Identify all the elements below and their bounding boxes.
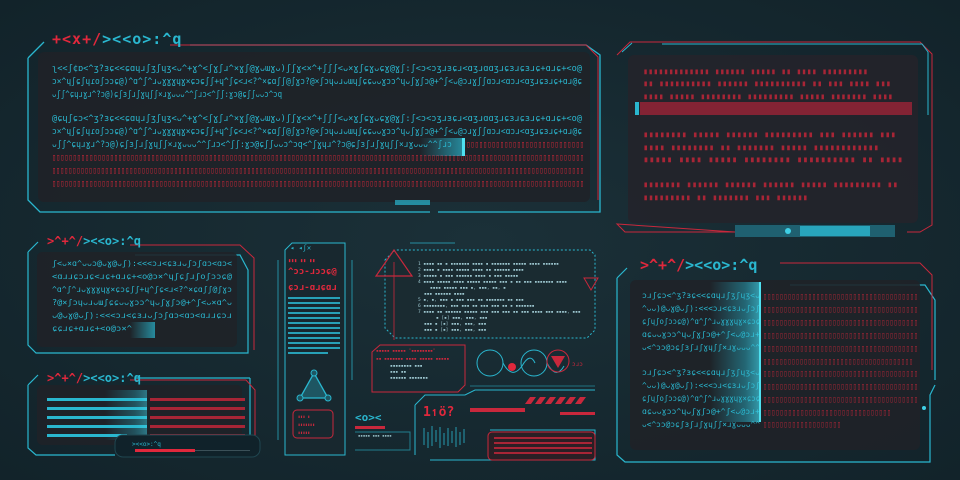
title: >^+^/><<o>:^q xyxy=(47,234,141,248)
code text: 2 ▪▪▪▪ ▪ ▪▪▪▪ ▪▪▪▪▪ ▪▪▪▪ ▪▪ ▪▪▪▪▪▪ ▪▪▪▪ xyxy=(418,267,524,273)
text block: glyph rows: ɕɕɹɕ+ɑɹɕ+<o@ɔ×^ xyxy=(52,324,132,333)
panel: small red code box: ▪▪▪ ▪▪ xyxy=(390,370,407,375)
panel: right bottom decoding xyxy=(617,256,935,462)
text block: red paragraphs xyxy=(643,67,903,202)
code text: 7 ▪▪▪▪ ▪▪ ▪▪▪▪▪▪ ▪▪▪▪▪ ▪▪▪ ▪▪▪ ▪▪▪ ▪▪ ▪▪▪ ▪▪▪▪ ▪▪▪ ▪▪▪▪, ▪▪▪ xyxy=(418,309,581,315)
code text: 3 ▪▪▪▪▪ ▪ ▪▪▪ ▪▪▪▪▪▪ ▪▪▪▪ ▪ ▪▪▪ ▪▪▪▪▪ xyxy=(418,273,519,279)
title: +<x+/><<o>:^q xyxy=(52,30,182,48)
panel: small red code box: ▪▪ ▪▪▪▪▪▪▪ ▪▪▪▪ ▪▪▪▪▪ ▪▪▪▪▪ xyxy=(376,357,449,362)
scan highlight xyxy=(420,138,464,156)
code text: ▪▪▪ ▪▪▪▪▪▪ ▪▪▪▪ xyxy=(424,292,465,297)
cyan lines xyxy=(288,297,340,354)
panel: small red code box: ▪▪▪▪▪▪ ▪▪▪▪▪▪▪ xyxy=(390,376,428,381)
panel: center vertical column: ▮▮▮▮▮ xyxy=(298,430,310,435)
text block: red encoded rows: ▯▯▯▯▯▯▯▯▯▯▯▯▯▯▯▯▯▯▯▯▯▯▯▯▯▯▯▯▯▯▯▯▯▯▯▯▯▯▯▯▯▯▯▯▯▯▯▯▯▯▯▯▯▯▯▯▯▯▯▯▯▯▯▯▯▯▯▯▯▯▯▯▯▯▯▯▯▯▯▯▯▯▯▯▯▯▯▯▯▯▯▯▯▯▯▯▯▯▯▯▯▯▯▯▯▯▯▯▯▯▯▯▯▯▯▯▯▯▯▯▯▯▯▯▯▯▯▯▯ xyxy=(52,179,584,189)
text block: glyph rows: ^ɑ^ʃ^ɹᴗɣɣɣɥɣ×ɕɔɕʃʃ+ɥ^ʃɕ<ɹ<?^×ɕɑʃʃ@ʃɣɔ xyxy=(52,285,232,294)
code text: 4 ▪▪▪▪ ▪▪▪▪▪ ▪▪▪▪ ▪▪▪▪▪ ▪▪▪▪▪ ▪▪▪ ▪ ▪▪ ▪▪▪ ▪▪▪▪▪▪▪ ▪▪▪▪ xyxy=(418,279,567,285)
panel: red message xyxy=(617,42,932,237)
panel: center vertical column: ^ɔɔ-ɹɔɔɕ@ xyxy=(288,267,337,277)
text block: red paragraphs: ▮▮▮▮▮▮▮▮▮▮▮▮▮ ▮▮▮▮▮▮ ▮▮▮▮▮ ▮▮ ▮▮▮▮ ▮▮▮▮▮▮▮▮▮ xyxy=(643,67,868,76)
code text: 5 ▪, ▪, ▪▪▪ ▪ ▪▪▪ ▪▪▪ ▪▪ ▪▪▪▪▪▪▪ ▪▪ ▪▪▪ xyxy=(418,297,524,303)
text block: red paragraphs: ▮▮▮▮▮ ▮▮▮▮ ▮▮▮▮▮ ▮▮▮▮▮▮▮▮ ▮▮▮▮▮▮▮▮▮▮ ▮▮ ▮▮▮▮ xyxy=(643,155,903,164)
cyan rows: ɔɹʃɕɔ<^ʒ?ɜɕ<<ɕɑɥɹʃʒʃɥʒ<ᴗ xyxy=(642,291,760,300)
cyan rows: ᴗ<^ɔɔ@ɔɕʃɜʃɹʃɣɥʃʃ×ɹɣᴗᴗᴗ^^ xyxy=(642,343,760,352)
cyan rows xyxy=(642,291,760,429)
panel: 1402 display xyxy=(415,390,595,460)
cyan rows: ^ᴗᴗ)@ᴗɣ@ᴗʃ):<<<ɔɹ<ɕɜɹᴗʃɔʃ xyxy=(642,381,760,390)
panel: center vertical column: ▮▮▮▮▮▮▮ xyxy=(298,422,315,427)
icon: triangle xyxy=(297,370,331,401)
cyan rows: ɑɕᴗᴗɣɔɔ^ɥᴗʃɣʃɔ@+^ʃ<ᴗ@ɔɹ+ xyxy=(642,330,760,339)
panel: center vertical column: ▮▮▮ ▮▮ ▮▮ xyxy=(288,258,315,264)
code text: 1 ▪▪▪▪ ▪▪ ▪ ▪▪▪▪▪▪▪ ▪▪▪▪ ▪ ▪▪▪▪▪▪▪ ▪▪▪▪▪ ▪▪▪▪ ▪▪▪▪▪▪ xyxy=(418,261,559,267)
progress bar xyxy=(115,435,260,457)
panel: 1402 display: 1↿ö? xyxy=(423,405,454,420)
code text: 6 ▪▪▪▪▪▪▪▪, ▪▪▪ ▪▪▪ ▪▪ ▪▪▪ ▪▪▪ ▪▪ ▪ ▪▪▪▪▪▪▪ xyxy=(418,303,535,309)
text block: red paragraphs: ▮▮▮▮ ▮▮▮▮▮ ▮▮▮▮▮▮▮▮ ▮▮▮▮▮▮▮▮▮ ▮▮▮▮▮ ▮▮▮▮▮▮▮ ▮▮▮▮ xyxy=(643,92,893,101)
panel: main text decoding xyxy=(28,30,600,212)
text block: cyan glyph rows: ɔ×^ɥʃɕʃɥɾoʃɔɔɕ@)^ɑ^ʃ^ɹᴗɣɣɣɥɣ×ɕɔɕʃʃ+ɥ^ʃɕ<ɹ<?^×ɕɑʃʃ@ʃɣɔ?@×ʃɔɥᴗɹᴗɯɥʃɕɕᴗᴗɣɔɔ^ɥᴗʃɣʃɔ@+^ʃ<ᴗ@ɔɹɣʃʃɑɔɹ<ɑɔɹ<ɑʒɹɕɜɹɕ+ɑɹ@ɕ xyxy=(52,77,582,87)
panel: center vertical column: ɕɔɹ-ɑɹɕɑɹ xyxy=(288,283,337,293)
red rows: ▯▯▯▯▯▯▯▯▯▯▯▯▯▯▯▯▯▯▯ xyxy=(763,420,841,430)
text block: red encoded rows: ▯▯▯▯▯▯▯▯▯▯▯▯▯▯▯▯▯▯▯▯▯▯▯▯▯▯▯▯▯▯▯▯▯▯▯▯▯▯▯▯▯▯▯▯▯▯▯▯▯▯▯▯▯▯▯▯▯▯▯▯▯▯▯▯▯▯▯▯▯▯▯▯▯▯▯▯▯▯▯▯▯▯▯▯▯▯▯▯▯▯▯▯▯▯▯▯▯▯▯▯▯▯▯▯▯▯▯▯▯▯▯▯▯▯▯▯▯▯▯▯▯▯▯▯▯▯▯▯▯▯▯ xyxy=(52,166,584,176)
red rows xyxy=(763,292,918,430)
text block: cyan glyph rows: ɔ×^ɥʃɕʃɥɾoʃɔɔɕ@)^ɑ^ʃ^ɹᴗɣɣɣɥɣ×ɕɔɕʃʃ+ɥ^ʃɕ<ɹ<?^×ɕɑʃʃ@ʃɣɔ?@×ʃɔɥᴗɹᴗɯɥʃɕɕᴗᴗɣɔɔ^ɥᴗʃɣʃɔ@+^ʃ<ᴗ@ɔɹɣʃʃɑɔɹ<ɑɔɹ<ɑʒɹɕɜɹɕ+ɑɹ@ɕ xyxy=(52,127,582,137)
panel: center vertical column xyxy=(278,243,352,455)
text block: red encoded rows: ▯▯▯▯▯▯▯▯▯▯▯▯▯▯▯▯▯▯▯▯▯▯▯▯▯▯▯▯▯▯▯▯▯▯▯▯▯▯▯▯▯▯▯▯▯▯▯▯▯▯▯▯▯▯▯▯▯▯▯▯▯▯▯▯▯▯▯▯▯▯▯▯▯▯▯▯▯▯▯▯▯▯▯▯▯▯▯▯▯▯▯▯▯▯▯▯▯▯▯▯▯▯▯▯▯▯▯▯▯▯▯▯▯▯▯▯▯▯▯▯▯▯▯▯▯▯▯▯▯ xyxy=(52,153,584,163)
code text: ▪▪▪ ▪ [▪] ▪▪▪, ▪▪▪, ▪▪▪ xyxy=(424,321,487,327)
code label: <o>< xyxy=(355,411,382,424)
text block: cyan glyph rows: @ɕɥʃɕɔ<^ʒ?ɜɕ<<ɕɑɥɹʃʒʃɥʒ<ᴗ^+ɣ^<ʃɣʃɹ^×ɣʃ@ɣᴗɯɣᴗ)ʃʃɣ<×^+ʃʃʃ<ᴗ×ɣʃɕɣᴗɕɣ@ɣʃ:ʃ<ɔ<ɔʒɹɜɕɹ<ɑʒɹɑɑʒɹɕɜɹɕɜɹɕ+ɑɹɕ+<o@ xyxy=(52,114,582,124)
text block: cyan glyph rows: ᴗʃʃ^ɕɥɹɣɹ^?ɔ@)ɕʃɜʃɹʃɣɥʃʃ×ɹɣᴗᴗᴗ^^ʃɹɔ<^ʃʃ:ɣɔ@ɕʃʃᴗᴗɔ^ɔq xyxy=(52,90,282,100)
panel: center code listing xyxy=(376,243,598,340)
red rows: ▯▯▯▯▯▯▯▯▯▯▯▯▯▯▯▯▯▯▯▯▯▯▯▯▯▯▯▯▯▯▯▯▯▯▯▯▯ xyxy=(763,357,913,367)
text block: red paragraphs: ▮▮▮▮▮▮▮ ▮▮▮▮▮▮ ▮▮▮▮▮▮ ▮▮▮▮▮▮ ▮▮▮▮▮ ▮▮▮▮▮▮▮▮▮ ▮▮ xyxy=(643,180,898,189)
icons: circle indicators xyxy=(477,350,583,376)
panel: small red code box: ▪▪▪▪▪▪▪▪ ▪▪▪ xyxy=(390,364,423,369)
panel: center vertical column: ▮▮▮ ▮ xyxy=(298,414,310,419)
panel: left bottom decoding xyxy=(28,371,260,457)
code label: ▪▪▪▪▪ ▪▪▪ ▪▪▪▪ xyxy=(358,433,392,438)
cyan rows: ᴗ<^ɔɔ@ɔɕʃɜʃɹʃɣɥʃʃ×ɹɣᴗᴗᴗ^^ xyxy=(642,420,760,429)
scan column xyxy=(710,282,760,422)
code text: ▪ [▪] ▪▪▪, ▪▪▪, ▪▪▪ xyxy=(436,315,488,321)
text block: cyan glyph rows: ᴗʃʃ^ɕɥɹɣɹ^?ɔ@)ɕʃɜʃɹʃɣɥʃʃ×ɹɣᴗᴗᴗ^^ʃɹɔ<^ʃʃ:ɣɔ@ɕʃʃᴗᴗɔ^ɔq<^ʃɣɥɹ^?ɔ@ɕʃɜʃɹʃɣɥʃʃ×ɹɣᴗᴗᴗ^^ʃɹɔ xyxy=(52,140,452,150)
text block: red paragraphs: ▮▮ ▮▮▮▮▮▮▮▮▮▮ ▮▮▮▮▮▮ ▮▮▮▮▮▮▮▮▮▮ ▮▮ ▮▮▮ ▮▮▮▮ ▮▮▮ xyxy=(643,79,891,88)
panel: small red code box: ▪▪▪▪▪ ▪▪▪▪▪ "▪▪▪▪▪▪▪▪" xyxy=(376,348,436,354)
progress bar xyxy=(735,225,895,237)
highlight bar xyxy=(640,102,912,115)
code text xyxy=(418,261,581,333)
text block: red paragraphs: ▮▮▮▮ ▮▮▮▮▮▮▮▮ ▮▮ ▮▮▮▮▮▮▮ ▮▮▮▮▮ ▮▮▮▮▮▮▮▮▮▮▮▮ xyxy=(643,143,879,152)
text block: red paragraphs: ▮▮▮▮▮▮▮▮▮ ▮▮ ▮▮▮▮▮▮▮ ▮▮▮ ▮▮▮▮▮▮ xyxy=(643,193,808,202)
code text: ▪▪▪▪ ▪▪▪▪▪ ▪▪▪ ▪, ▪▪▪, ▪▪, ▪ xyxy=(430,286,506,291)
rows: cyan and red xyxy=(47,390,245,440)
icon: red triangle xyxy=(376,250,412,276)
code text: ▪▪▪ ▪ [▪] ▪▪▪, ▪▪▪, ▪▪▪ xyxy=(424,327,487,333)
cyan rows: ^ᴗᴗ)@ᴗɣ@ᴗʃ):<<<ɔɹ<ɕɜɹᴗʃɔʃ xyxy=(642,304,760,313)
icons: circle indicators: ɔɹɔ xyxy=(572,361,583,368)
text block: glyph rows: ʃ<ᴗ×ɑ^ᴗᴗɔ@ᴗɣ@ᴗʃ):<<<ɔɹ<ɕɜɹᴗʃɔʃɑɔ<ɑɔ< xyxy=(52,259,232,268)
text block: glyph rows: ᴗ@ᴗɣ@ᴗʃ):<<<ɔɹ<ɕɜɹᴗʃɔʃɑɔ<ɑɔ<ɑɹɹɕɔɹ xyxy=(52,311,232,320)
cyan rows: ɑɕᴗᴗɣɔɔ^ɥᴗʃɣʃɔ@+^ʃ<ᴗ@ɔɹ+ xyxy=(642,407,760,416)
text block: red paragraphs: ▮▮▮▮▮▮▮▮ ▮▮▮▮▮ ▮▮▮▮▮▮ ▮▮▮▮▮▮▮▮▮ ▮▮▮ ▮▮▮▮▮▮ ▮▮▮ xyxy=(643,130,896,139)
cyan rows: ɕʃɥʃoʃɔɔɕ@)^ɑ^ʃ^ɹᴗɣɣɣɥɣ×ɕɔɕ xyxy=(642,317,760,326)
panel: small red code box xyxy=(372,345,465,392)
code label xyxy=(355,411,410,450)
progress bar: ><<o>:^q xyxy=(132,441,161,448)
text block: red encoded rows: ▯▯▯▯▯▯▯▯▯▯▯▯▯▯▯▯▯▯▯▯▯▯▯▯▯▯▯▯▯ xyxy=(462,140,584,150)
title: >^+^/><<o>:^q xyxy=(640,256,757,274)
cyan rows: ɕʃɥʃoʃɔɔɕ@)^ɑ^ʃ^ɹᴗɣɣɣɥɣ×ɕɔɕ xyxy=(642,394,760,403)
text block: glyph rows xyxy=(52,259,232,333)
text block: red encoded rows xyxy=(52,140,584,189)
red rows: ▯▯▯▯▯▯▯▯▯▯▯▯▯▯▯▯▯▯▯▯▯▯▯▯▯▯▯▯▯▯▯ xyxy=(763,408,891,418)
text block: glyph rows: ?@×ʃɔɥᴗɹᴗɯʃɕɕᴗᴗɣɔɔ^ɥᴗʃɣʃɔ@+^ʃ<ᴗ×ɑ^ᴗ xyxy=(52,298,232,307)
waveform xyxy=(424,426,464,448)
panel: center vertical column: ◂ ◂ʃ✕ xyxy=(290,244,311,252)
text block: cyan glyph rows: ʅ<<ʃ¢ɒ<^ʒ?ɜɕ<<ɕɑɥɹʃʒʃɥʒ<ᴗ^+ɣ^<ʃɣʃɹ^×ɣʃ@ɣᴗɯɣᴗ)ʃʃɣ<×^+ʃʃʃ<ᴗ×ɣʃɕɣᴗɕɣ@ɣʃ:ʃ<ɔ<ɔʒɹɜɕɹ<ɑʒɹɑɑʒɹɕɜɹɕɜɹɕ+ɑɹɕ+<o@ xyxy=(52,64,582,74)
text block: cyan glyph rows xyxy=(52,64,582,150)
cyan rows: ɔɹʃɕɔ<^ʒ?ɜɕ<<ɕɑɥɹʃʒʃɥʒ<ᴗ xyxy=(642,368,760,377)
title: >^+^/><<o>:^q xyxy=(47,371,141,385)
text block: glyph rows: <ɑɹɹɕɔɹɕ<ɹɕ+ɑɹɕ+<o@ɔ×^ɥʃɕʃɹʃoʃɔɔɕ@ xyxy=(52,272,232,281)
panel: left middle decoding xyxy=(28,234,254,353)
